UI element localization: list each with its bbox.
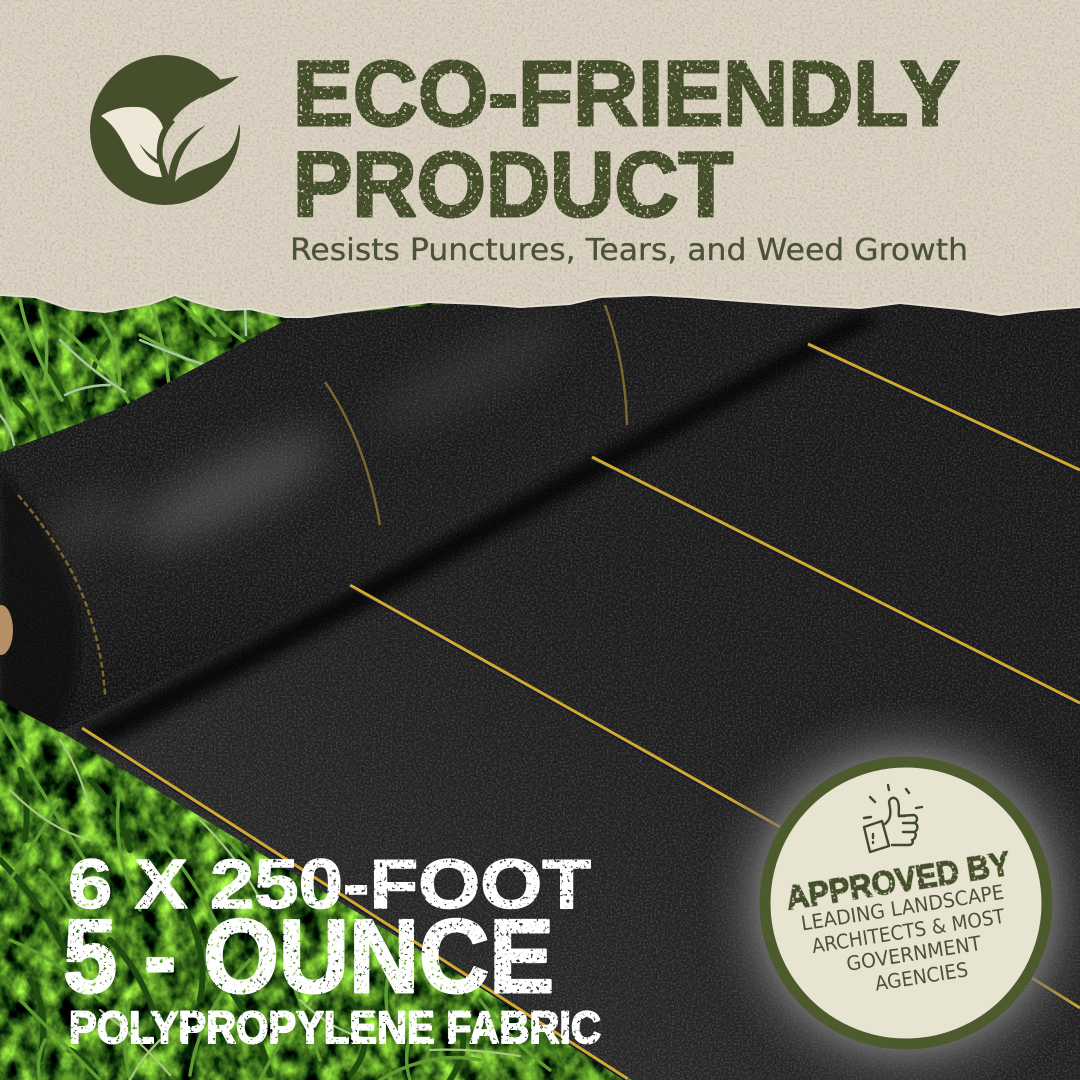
roll highlight: [127, 420, 335, 560]
grass blades: lower left patch: [0, 720, 550, 1080]
product specs text: POLYPROPYLENE FABRIC: [69, 1002, 601, 1053]
product specs text: [63, 845, 601, 1053]
right sprout: [168, 125, 206, 182]
ground fabric sheet: [55, 280, 1080, 1080]
left sprout: [139, 143, 158, 164]
fabric roll: [0, 296, 750, 732]
grass blades: upper left patch: [0, 300, 250, 450]
right leaf: [165, 125, 239, 204]
heading: eco-friendly product: ECO-FRIENDLY: [293, 43, 960, 145]
badge description: GOVERNMENT: [845, 931, 983, 976]
leaf tail: [200, 76, 239, 99]
roll end shading: [0, 470, 79, 732]
approved by text: APPROVED BY: [784, 845, 1013, 916]
product specs text: 5 - OUNCE: [63, 899, 554, 1015]
badge description: ARCHITECTS & MOST: [810, 904, 1007, 958]
icon: eco leaf logo: [90, 55, 240, 205]
badge: approved by: [765, 762, 1047, 1044]
product specs text: 6 X 250-FOOT: [68, 845, 591, 923]
subtitle: Resists Punctures, Tears, and Weed Growth: [290, 233, 968, 268]
torn paper banner: [0, 0, 1080, 318]
grass background: [0, 280, 700, 1080]
center stem: [157, 120, 175, 180]
yellow stripes: [82, 344, 1080, 1080]
badge description: LEADING LANDSCAPE: [799, 880, 1006, 935]
badge glow: [701, 698, 1080, 1080]
badge description: AGENCIES: [873, 957, 970, 996]
icon: thumbs up: [864, 785, 922, 852]
heading: eco-friendly product: PRODUCT: [293, 134, 733, 236]
badge description: [799, 880, 1017, 1006]
cardboard core: [0, 605, 13, 655]
roll seams: [18, 305, 627, 695]
roll shadow on sheet: [70, 312, 880, 745]
heading: eco-friendly product: [293, 43, 960, 236]
cream leaf: [101, 107, 163, 177]
